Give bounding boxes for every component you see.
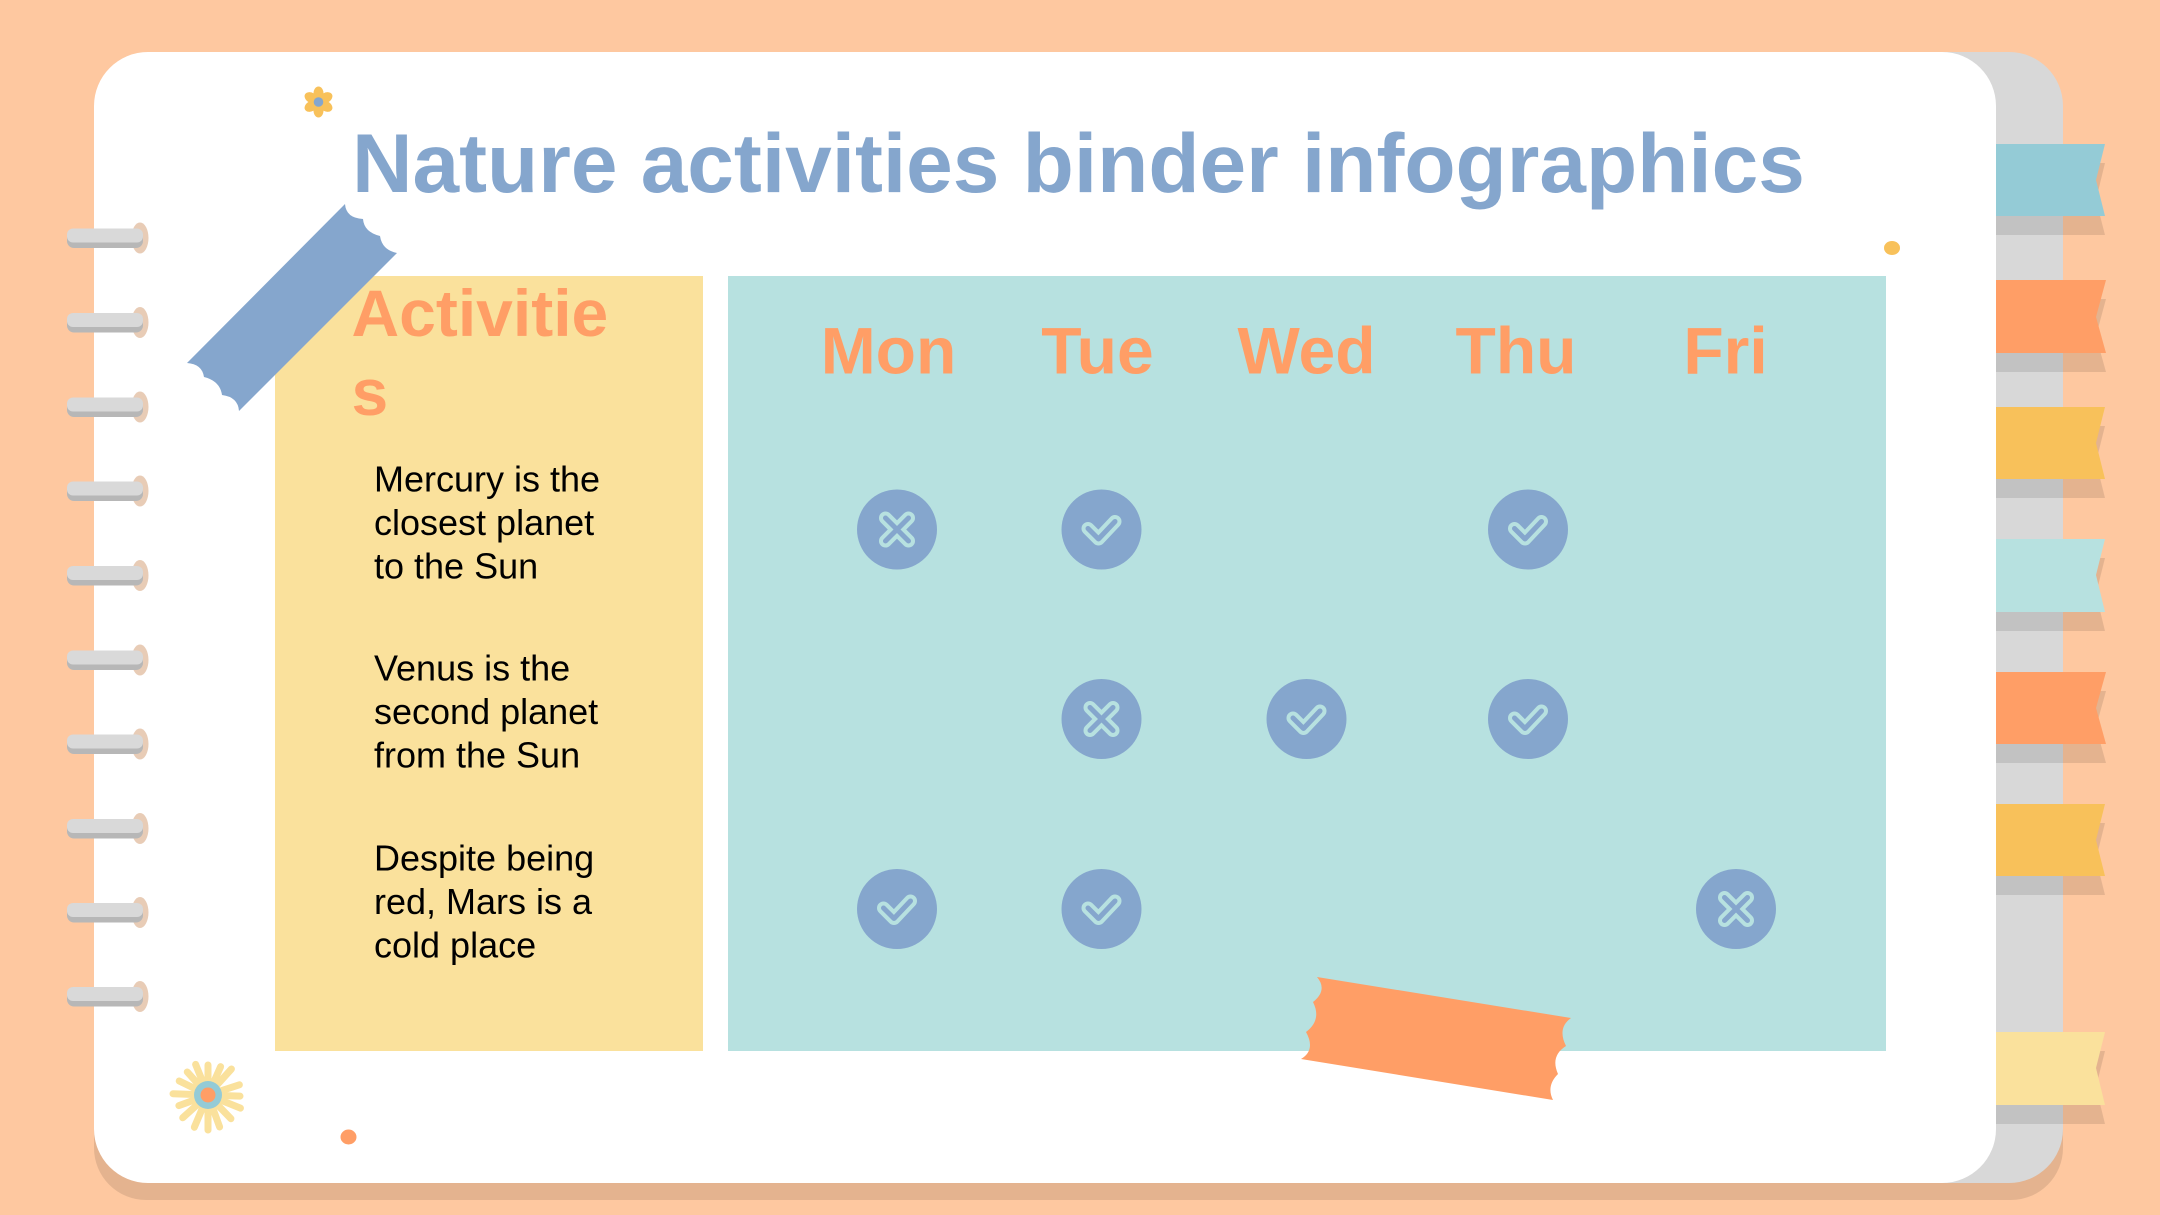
row 3 marks [857,869,1776,949]
day headings: Tue [1041,314,1154,388]
tab: gold [1996,407,2105,498]
index tabs [1996,144,2106,1124]
heading: activities: Activitie [352,276,608,350]
day headings: Thu [1456,314,1576,388]
tab: pale yellow [1996,1032,2105,1124]
text: activity 2: Venus is the [374,648,570,688]
tab: gold lower [1996,804,2105,895]
row 2 marks [1062,679,1568,759]
dot: gold [1884,241,1900,255]
text: activity 3: cold place [374,924,536,966]
text: activity 2: second planet [374,691,598,732]
icon: daisy sun [173,1064,240,1130]
text: activity 1: Mercury is the [374,458,600,500]
panel: activities [275,276,703,1051]
panel: weekly schedule [728,276,1886,1051]
tab: orange [1996,280,2106,372]
text: activity 1: closest planet [374,502,594,543]
dot: orange [340,1130,356,1144]
blue washi tape [187,204,397,411]
text: activity 3: red, Mars is a [374,881,593,922]
tab: blue [1996,144,2105,235]
tab: teal [1996,539,2105,631]
text: activity 2: from the Sun [374,734,580,776]
day headings [821,314,1768,388]
heading: activities: s [352,355,388,429]
binder rings [67,222,148,1012]
row 1 marks [857,490,1568,570]
day headings: Wed [1237,314,1376,388]
day headings: Fri [1683,314,1768,388]
day headings: Mon [821,314,956,388]
icon: small gold flower [303,86,334,118]
tab: orange lower [1996,672,2106,763]
text: activity 3: Despite being [374,838,594,878]
title: Nature activities binder infographics [352,116,1805,210]
orange washi tape [1301,977,1571,1100]
text: activity 1: to the Sun [374,546,538,586]
